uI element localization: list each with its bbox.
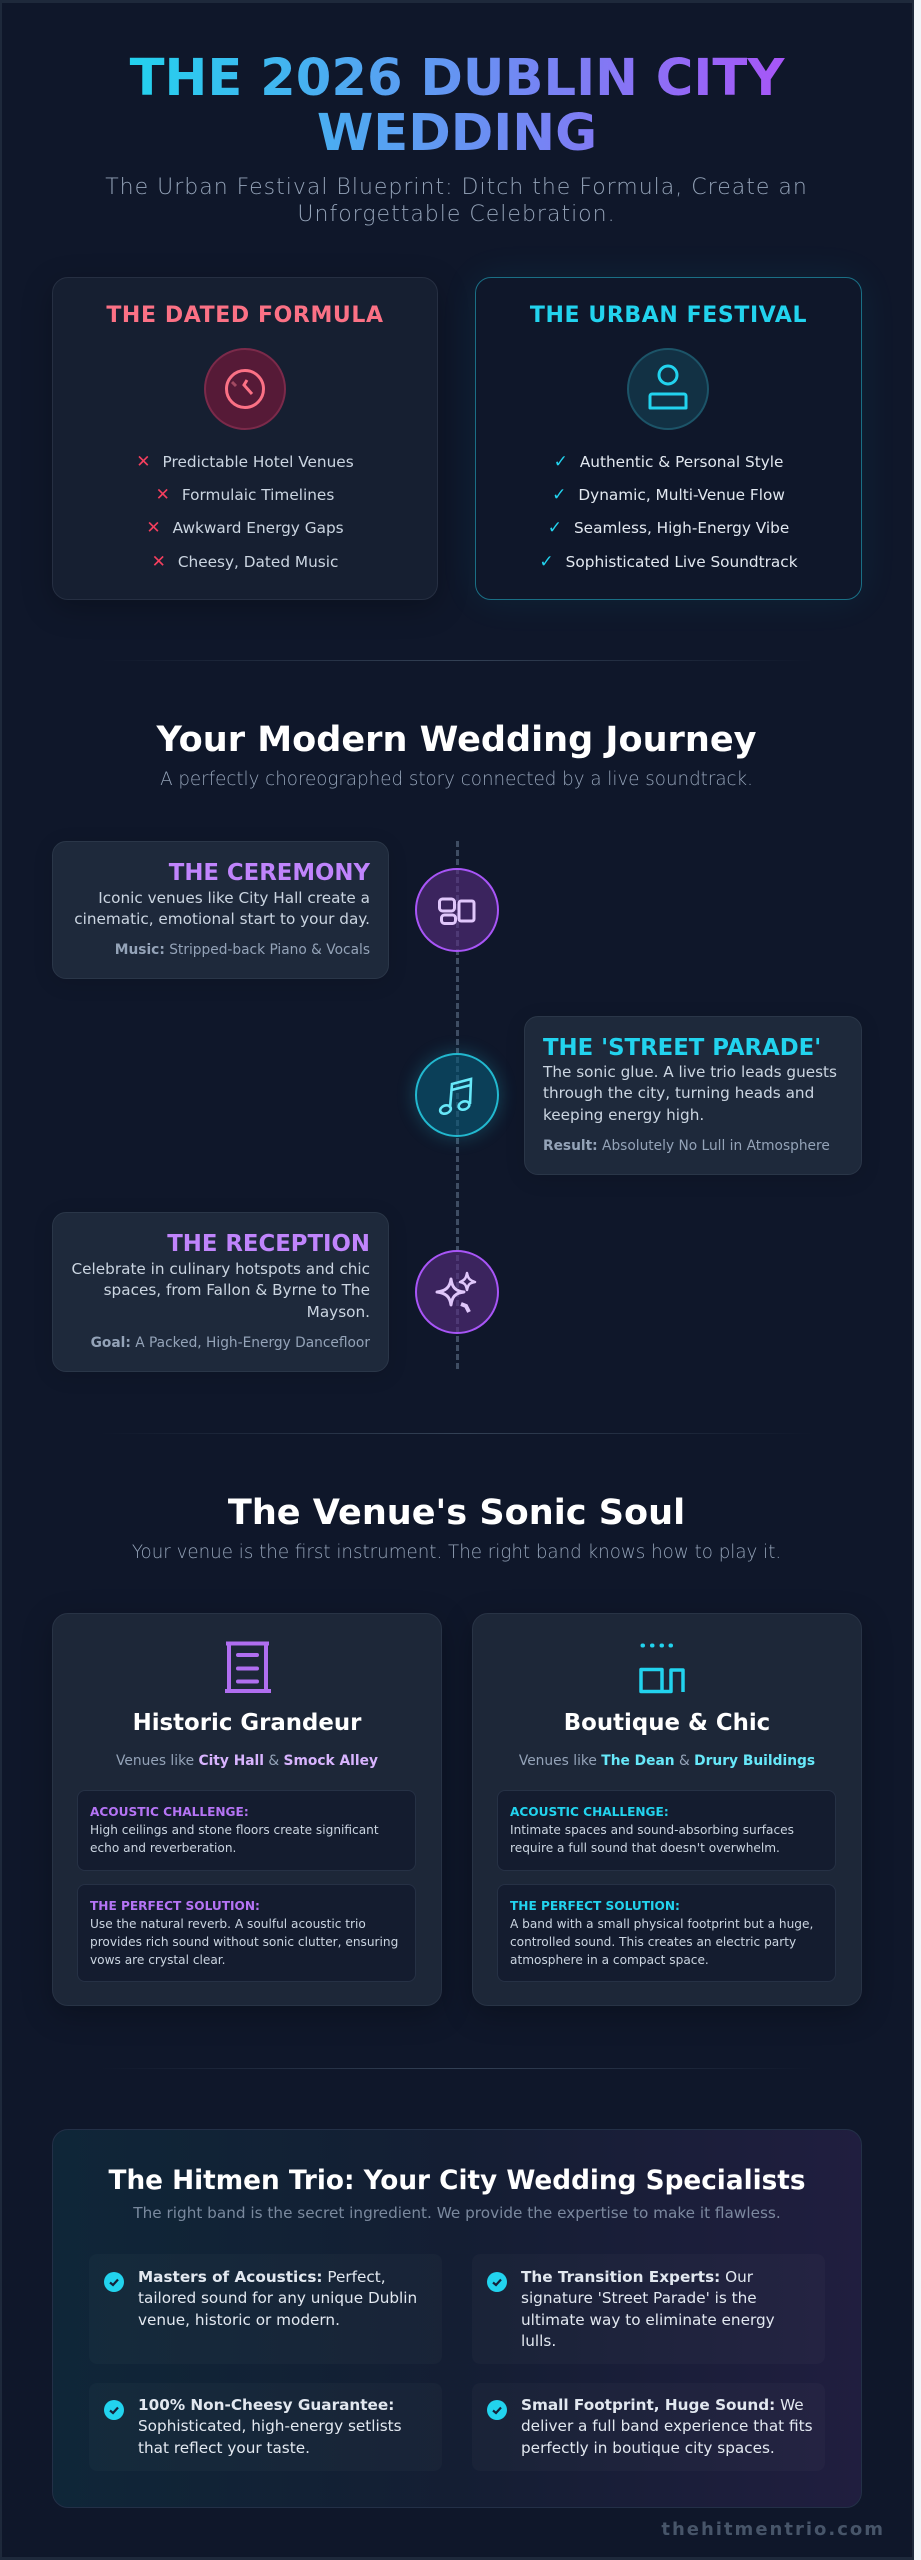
text: non-cheesy guarantee: 100% Non-Cheesy Guarantee:	[138, 2396, 394, 2414]
icon: check	[487, 2400, 507, 2420]
list: formula flaws	[136, 452, 354, 572]
callout: perfect solution	[497, 1884, 836, 1982]
text: reception body: Mayson.	[307, 1303, 370, 1321]
text: transition experts: ultimate way to eliminate energy	[521, 2311, 775, 2329]
text: transition experts: signature 'Street Parade' is the	[521, 2289, 757, 2307]
callout: perfect solution: controlled sound. This creates an electric party	[510, 1935, 796, 1949]
list: festival benefits: ✓ Dynamic, Multi-Venue Flow	[552, 485, 785, 505]
icon: check	[487, 2272, 507, 2292]
text: street parade body: keeping energy high.	[543, 1106, 704, 1124]
text: small footprint: perfectly in boutique city spaces.	[521, 2439, 775, 2457]
list: festival benefits: ✓ Sophisticated Live Soundtrack	[539, 552, 798, 572]
note: ceremony music: Music: Stripped-back Piano & Vocals	[115, 942, 370, 958]
subtitle	[105, 174, 808, 227]
icon: boutique building	[639, 1644, 685, 1694]
callout: acoustic challenge: echo and reverberation.	[90, 1841, 236, 1855]
title: THE 2026 DUBLIN CITY	[130, 48, 784, 108]
callout: perfect solution: A band with a small physical footprint but a huge,	[510, 1917, 813, 1931]
note: street parade result: Result: Absolutely No Lull in Atmosphere	[543, 1138, 830, 1154]
feature: masters of acoustics	[89, 2254, 442, 2364]
icon: ceremony node	[415, 868, 499, 952]
callout: perfect solution: provides rich sound without sonic clutter, ensuring	[90, 1935, 398, 1949]
panel: hitmen trio	[52, 2129, 862, 2508]
text: transition experts: The Transition Experts: Our	[521, 2268, 753, 2286]
subheading: journey: A perfectly choreographed story connected by a live soundtrack.	[160, 769, 753, 790]
note: reception goal: Goal: A Packed, High-Energy Dancefloor	[91, 1335, 370, 1351]
text: masters of acoustics	[138, 2268, 417, 2329]
text: ceremony body: Iconic venues like City Hall create a	[98, 889, 370, 907]
timeline card: reception	[52, 1212, 389, 1372]
heading: ceremony: THE CEREMONY	[169, 860, 370, 886]
text: reception body: Celebrate in culinary hotspots and chic	[72, 1260, 370, 1278]
text: masters of acoustics: venue, historic or modern.	[138, 2311, 340, 2329]
text: masters of acoustics: Masters of Acoustics: Perfect,	[138, 2268, 386, 2286]
text: historic venues: Venues like City Hall & Smock Alley	[116, 1753, 378, 1769]
text: transition experts	[521, 2268, 775, 2350]
title: WEDDING	[317, 102, 597, 162]
list: formula flaws: ✕ Formulaic Timelines	[156, 485, 334, 505]
icon: historic building	[225, 1642, 271, 1693]
text: non-cheesy guarantee	[138, 2396, 402, 2457]
panel: historic grandeur	[52, 1613, 442, 2006]
icon: check	[104, 2272, 124, 2292]
callout: acoustic challenge	[497, 1790, 836, 1871]
callout: acoustic challenge: ACOUSTIC CHALLENGE:	[510, 1804, 669, 1818]
text: ceremony body	[74, 889, 370, 928]
callout: acoustic challenge: require a full sound that doesn't overwhelm.	[510, 1841, 780, 1855]
heading: venue's sonic soul: The Venue's Sonic Soul	[228, 1492, 685, 1533]
text: street parade body	[542, 1063, 837, 1124]
footer website: thehitmentrio.com	[661, 2519, 885, 2540]
text: street parade body: The sonic glue. A live trio leads guests	[543, 1063, 837, 1081]
icon: music node	[415, 1053, 499, 1137]
callout: perfect solution: THE PERFECT SOLUTION:	[90, 1898, 260, 1912]
icon: clock	[204, 348, 286, 430]
icon: check	[104, 2400, 124, 2420]
heading: street parade: THE 'STREET PARADE'	[543, 1035, 821, 1061]
timeline card: ceremony	[52, 841, 389, 979]
text: ceremony body: cinematic, emotional start to your day.	[74, 910, 370, 928]
text: masters of acoustics: tailored sound for any unique Dublin	[138, 2289, 417, 2307]
callout: acoustic challenge: High ceilings and stone floors create significant	[90, 1823, 379, 1837]
timeline card: street parade	[524, 1016, 862, 1175]
text: boutique venues: Venues like The Dean & Drury Buildings	[519, 1753, 815, 1769]
panel: the dated formula	[52, 277, 438, 600]
callout: perfect solution: atmosphere in a compact space.	[510, 1953, 709, 1967]
panel: the urban festival	[475, 277, 862, 600]
text: transition experts: lulls.	[521, 2332, 556, 2350]
text: non-cheesy guarantee: that reflect your taste.	[138, 2439, 310, 2457]
text: small footprint: deliver a full band experience that fits	[521, 2417, 813, 2435]
title	[125, 51, 789, 160]
feature: small footprint	[472, 2383, 825, 2471]
subtitle: The Urban Festival Blueprint: Ditch the Formula, Create an	[105, 174, 808, 200]
callout: perfect solution: Use the natural reverb. A soulful acoustic trio	[90, 1917, 366, 1931]
heading: boutique and chic: Boutique & Chic	[564, 1710, 770, 1736]
subheading: venue: Your venue is the first instrument. The right band knows how to play it.	[132, 1542, 781, 1563]
callout: perfect solution: vows are crystal clear.	[90, 1953, 226, 1967]
heading: hitmen trio: The Hitmen Trio: Your City Wedding Specialists	[109, 2166, 805, 2196]
list: festival benefits	[539, 452, 798, 572]
feature: transition experts	[472, 2254, 825, 2364]
heading: urban festival: THE URBAN FESTIVAL	[530, 303, 807, 328]
callout: perfect solution: THE PERFECT SOLUTION:	[510, 1898, 680, 1912]
list: festival benefits: ✓ Authentic & Personal Style	[554, 452, 783, 472]
icon: sparkle node	[415, 1250, 499, 1334]
timeline line	[456, 841, 458, 1372]
subheading: hitmen trio: The right band is the secret ingredient. We provide the expertise to make it flawless.	[133, 2204, 781, 2222]
callout: acoustic challenge	[77, 1790, 416, 1871]
list: formula flaws: ✕ Cheesy, Dated Music	[152, 552, 338, 572]
callout: acoustic challenge: ACOUSTIC CHALLENGE:	[90, 1804, 249, 1818]
callout: acoustic challenge: Intimate spaces and sound-absorbing surfaces	[510, 1823, 794, 1837]
heading: modern wedding journey: Your Modern Wedding Journey	[156, 719, 756, 760]
text: reception body	[72, 1260, 370, 1321]
panel: boutique and chic	[472, 1613, 862, 2006]
text: street parade body: through the city, turning heads and	[543, 1084, 814, 1102]
text: small footprint	[521, 2396, 813, 2457]
feature: non-cheesy guarantee	[89, 2383, 442, 2471]
subtitle: Unforgettable Celebration.	[297, 202, 616, 227]
heading: historic grandeur: Historic Grandeur	[133, 1710, 361, 1736]
text: small footprint: Small Footprint, Huge Sound: We	[521, 2396, 804, 2414]
heading: reception: THE RECEPTION	[167, 1231, 370, 1257]
icon: person	[627, 348, 709, 430]
list: formula flaws: ✕ Awkward Energy Gaps	[146, 518, 344, 538]
callout: perfect solution	[77, 1884, 416, 1982]
heading: dated formula: THE DATED FORMULA	[106, 303, 384, 328]
list: festival benefits: ✓ Seamless, High-Energy Vibe	[548, 518, 789, 538]
text: non-cheesy guarantee: Sophisticated, high-energy setlists	[138, 2417, 402, 2435]
list: formula flaws: ✕ Predictable Hotel Venues	[136, 452, 354, 472]
text: reception body: spaces, from Fallon & Byrne to The	[104, 1281, 370, 1299]
